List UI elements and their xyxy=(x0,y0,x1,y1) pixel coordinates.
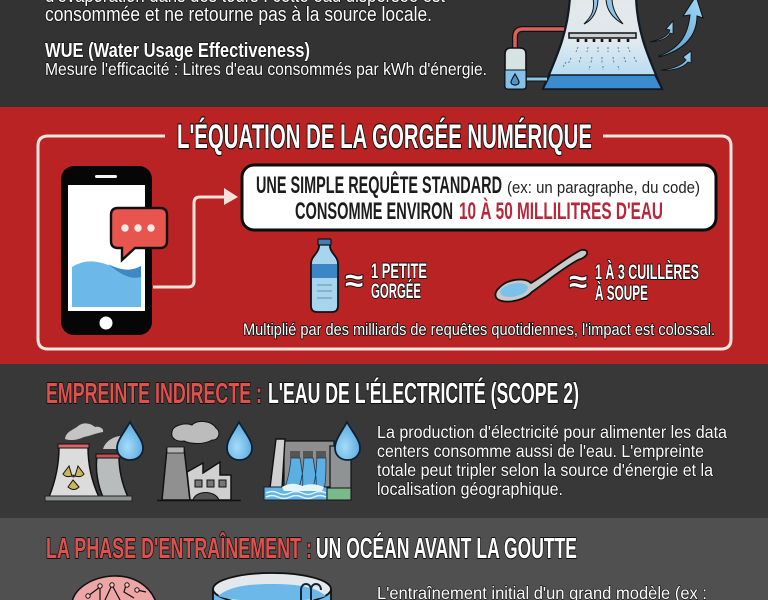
icon: water drop 2 xyxy=(227,422,252,460)
icon: water drop 3 xyxy=(335,422,360,460)
text: approx small sip xyxy=(345,260,427,303)
callout: water per request: UNE SIMPLE REQUÊTE STANDARD xyxy=(256,171,502,199)
arrow: phone to statement xyxy=(153,188,238,287)
text: WUE definition: Mesure l'efficacité : Litres d'eau consommés par kWh d'énergie. xyxy=(45,59,487,79)
callout: water per request xyxy=(242,165,716,230)
text: indirect footprint description xyxy=(377,422,727,499)
icon: nuclear plant xyxy=(45,423,132,501)
panel: indirect footprint xyxy=(0,364,768,518)
panel: digital sip equation xyxy=(0,107,768,364)
icon: water bottle xyxy=(311,239,338,312)
text: approx tablespoons: 1 À 3 CUILLÈRES xyxy=(595,261,699,284)
frame xyxy=(38,136,731,349)
callout: water per request: CONSOMME ENVIRON xyxy=(295,198,453,225)
icon: smartphone xyxy=(61,166,167,335)
text: indirect footprint description: localisation géographique. xyxy=(377,479,563,499)
icon: swimming pool xyxy=(213,573,331,600)
panel: cooling water section xyxy=(0,0,768,106)
heading: indirect footprint: EMPREINTE INDIRECTE : xyxy=(46,378,262,410)
text: indirect footprint description: centers consomme aussi de l'eau. L'empreinte xyxy=(377,441,704,461)
icon: hydro dam xyxy=(264,439,351,500)
text: approx small sip: 1 PETITE xyxy=(371,260,427,283)
icon: brain xyxy=(72,576,156,600)
heading: training phase: UN OCÉAN AVANT LA GOUTTE xyxy=(316,531,577,565)
text: indirect footprint description: totale peut tripler selon la source d'énergie et la xyxy=(377,460,713,480)
heading: training phase: LA PHASE D'ENTRAÎNEMENT : xyxy=(46,531,312,565)
text: approx tablespoons xyxy=(569,261,699,305)
heading: indirect footprint xyxy=(46,376,579,410)
text: approx small sip: GORGÉE xyxy=(371,280,421,303)
icon: factory xyxy=(157,421,241,500)
icon: spoon xyxy=(495,250,587,302)
text: indirect footprint description: La production d'électricité pour alimenter les data xyxy=(377,422,727,442)
callout: water per request: (ex: un paragraphe, du code) xyxy=(507,178,700,197)
heading: WUE: WUE (Water Usage Effectiveness) xyxy=(45,40,310,62)
icon: cooling tower xyxy=(505,0,703,89)
panel: training phase xyxy=(0,518,768,600)
heading: indirect footprint: L'EAU DE L'ÉLECTRICITÉ (SCOPE 2) xyxy=(268,376,579,410)
text: approx small sip: ≈ xyxy=(345,263,363,298)
text: approx tablespoons: À SOUPE xyxy=(595,282,648,305)
text: approx tablespoons: ≈ xyxy=(569,264,587,299)
text: consumed water: consommée et ne retourne pas à la source locale. xyxy=(45,4,432,26)
icon: water drop 1 xyxy=(117,422,143,460)
